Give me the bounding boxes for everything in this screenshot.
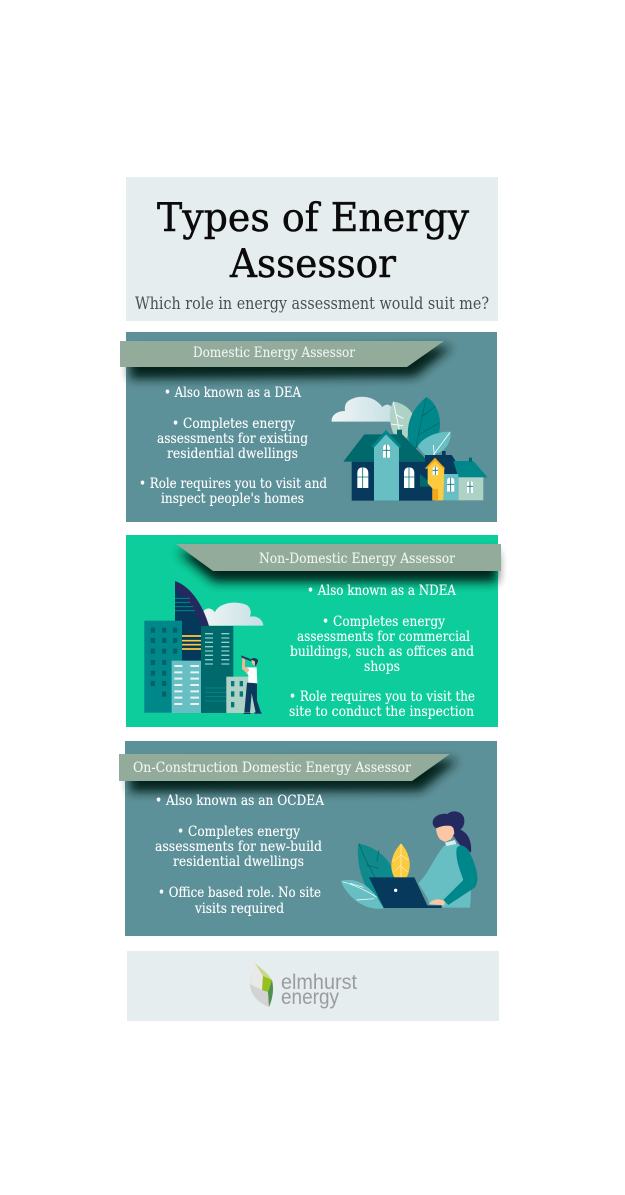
text: non-domestic role details: • Completes energy xyxy=(322,614,445,630)
text: domestic role details: inspect people's homes xyxy=(161,491,304,507)
ribbon: non-domestic: Non-Domestic Energy Assessor xyxy=(259,551,455,567)
text: non-domestic role details: site to conduct the inspection xyxy=(289,704,474,720)
heading: Assessor xyxy=(229,242,396,287)
heading xyxy=(157,196,469,287)
subtitle: Which role in energy assessment would suit me? xyxy=(135,294,489,313)
ribbon: on-construction: On-Construction Domestic Energy Assessor xyxy=(133,760,411,776)
text: non-domestic role details: buildings, such as offices and xyxy=(290,644,474,660)
text: domestic role details: • Completes energy xyxy=(172,416,295,432)
panel: On-Construction Domestic Energy Assessor xyxy=(119,741,497,936)
logo wordmark xyxy=(281,971,357,1009)
text: non-domestic role details: • Role requires you to visit the xyxy=(289,689,475,705)
panel: footer logo xyxy=(127,951,499,1021)
logo wordmark: energy xyxy=(281,986,339,1009)
text: on-construction role details: assessments for new-build xyxy=(155,839,322,855)
text: on-construction role details: • Office based role. No site xyxy=(158,885,321,901)
text: on-construction role details: • Also known as an OCDEA xyxy=(155,793,324,809)
icon: city buildings and person with binoculars xyxy=(144,581,263,714)
icon: woman working at laptop with leaves xyxy=(341,811,477,909)
text: non-domestic role details: assessments for commercial xyxy=(297,629,470,645)
panel: title xyxy=(126,177,498,321)
ribbon: domestic: Domestic Energy Assessor xyxy=(193,345,355,361)
text: on-construction role details: visits required xyxy=(194,901,284,917)
panel: Domestic Energy Assessor xyxy=(120,332,497,522)
panel: Non-Domestic Energy Assessor xyxy=(126,535,501,727)
ribbon: non-domestic xyxy=(176,544,501,582)
icon: houses and leaves xyxy=(332,397,488,501)
text: non-domestic role details xyxy=(289,583,475,720)
icon: leaf logo xyxy=(250,963,273,1007)
text: non-domestic role details: • Also known as a NDEA xyxy=(307,583,456,599)
text: domestic role details: assessments for existing xyxy=(157,431,308,447)
windows xyxy=(357,444,473,493)
logo wordmark: elmhurst xyxy=(281,971,357,994)
ribbon: on-construction xyxy=(119,754,458,792)
text: on-construction role details xyxy=(155,793,324,917)
text: non-domestic role details: shops xyxy=(364,659,400,675)
text: domestic role details: residential dwellings xyxy=(167,446,298,462)
heading: Types of Energy xyxy=(157,196,469,241)
text: domestic role details: • Role requires you to visit and xyxy=(139,476,327,492)
text: domestic role details: • Also known as a DEA xyxy=(164,385,301,401)
text: on-construction role details: • Completes energy xyxy=(177,824,300,840)
text: on-construction role details: residential dwellings xyxy=(173,854,304,870)
person xyxy=(241,655,262,714)
text: domestic role details xyxy=(139,385,327,507)
ribbon: domestic xyxy=(120,341,452,379)
